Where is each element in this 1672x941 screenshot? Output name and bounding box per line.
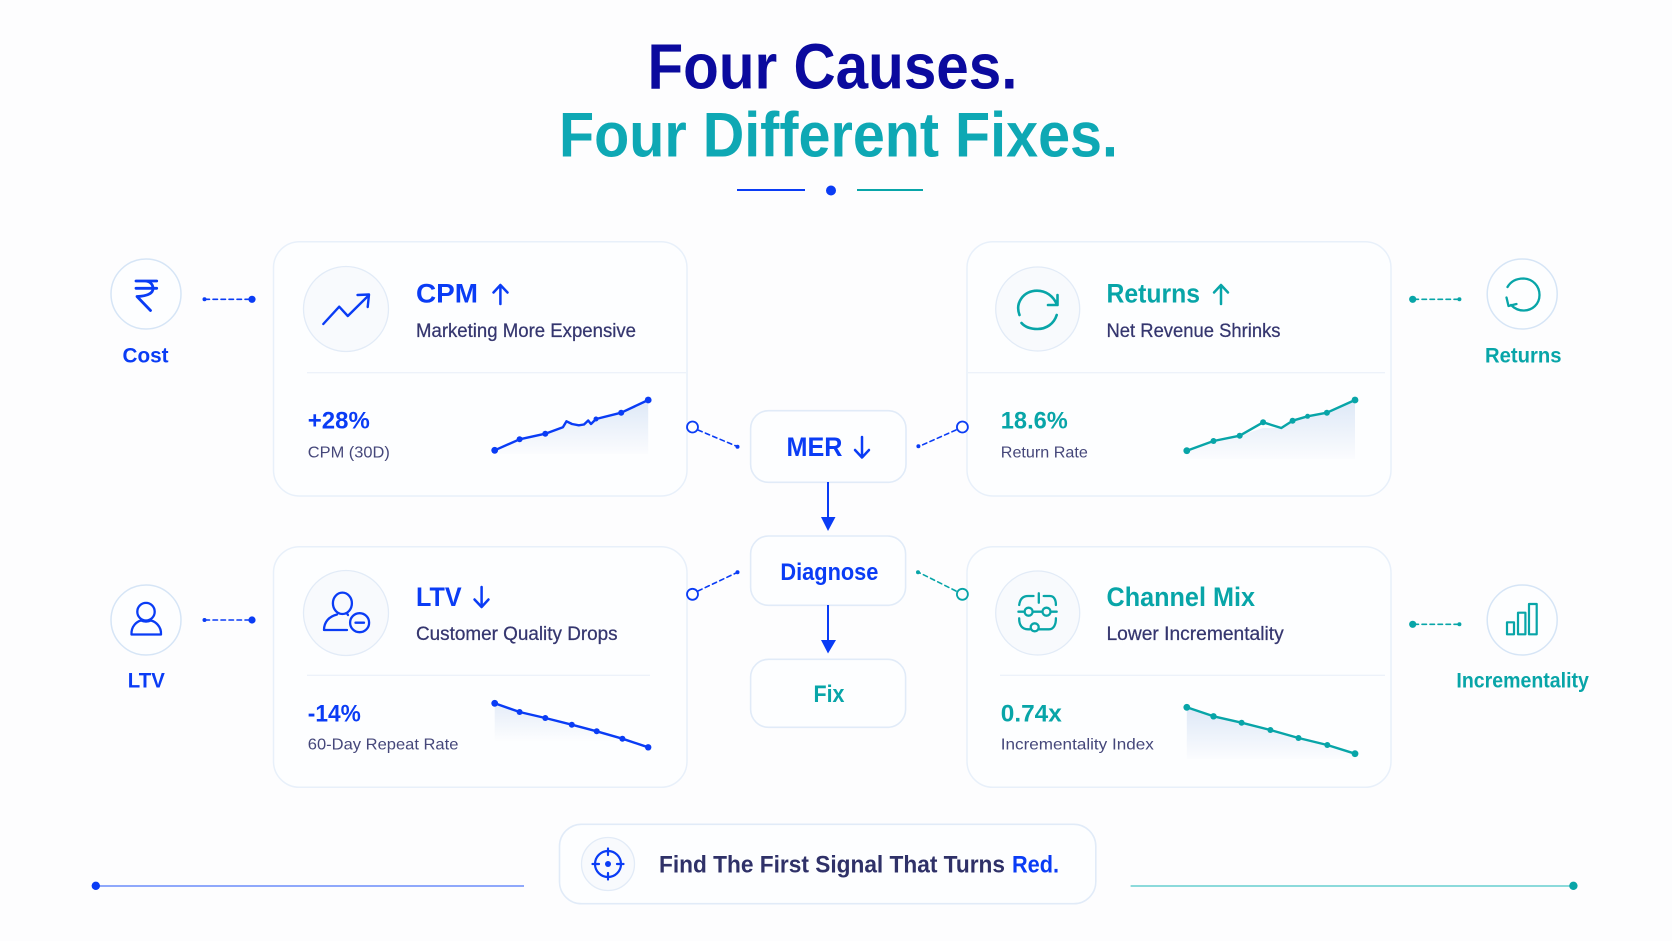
stat: 18.6% [1001,407,1068,434]
connector: returns side [1409,296,1461,303]
connector: cost to CPM [202,296,256,303]
title divider [737,186,923,196]
icon: rupee [136,281,157,310]
arrow: diagnose to fix [821,605,836,654]
connector: incrementality side [1409,621,1461,628]
stat label: Return Rate [1001,444,1088,461]
callout text: Find The First Signal That Turns [659,851,1005,878]
connector: returns to MER [916,422,968,448]
box: diagnose: Diagnose [780,559,878,586]
stat label: 60-Day Repeat Rate [308,736,459,753]
box: diagnose [751,536,906,605]
connector: LTV to diagnose [687,570,740,600]
sparkline: falling incrementality [1183,704,1358,759]
heading: channel mix: Channel Mix [1106,582,1255,612]
connector: LTV side [202,616,256,624]
arrow: MER to diagnose [821,482,836,531]
callout: first signal [560,824,1096,904]
panel: CPM [274,242,687,496]
stat label: CPM (30D) [308,444,390,461]
connector: channel mix to diagnose [916,570,968,600]
panel: returns [967,242,1391,496]
heading: LTV down: LTV [416,582,462,612]
icon: channel sliders [996,571,1080,655]
side label: incrementality: Incrementality [1456,669,1589,692]
sparkline: rising CPM [491,397,652,454]
panel: channel mix [967,547,1391,787]
sparkline: rising return rate [1183,397,1358,459]
footer line: left [92,882,524,890]
side label: returns [1485,259,1562,368]
subtitle: Net Revenue Shrinks [1106,321,1280,342]
box: MER [751,411,906,482]
side label: incrementality [1456,585,1589,692]
stat: 0.74x [1001,701,1062,728]
icon: trend up [304,266,388,352]
callout emphasis: Red. [1012,851,1059,878]
icon: refresh small [1506,278,1540,310]
title line 2: Four Different Fixes. [559,100,1118,170]
panel: LTV [274,547,687,787]
heading: CPM up: CPM [416,279,478,309]
icon: refresh [996,267,1080,351]
heading: returns up: Returns [1106,279,1200,309]
footer line: right [1131,882,1578,890]
connector: CPM to MER [687,422,740,449]
stat: +28% [308,407,370,434]
side label: cost: Cost [122,345,169,368]
subtitle: Lower Incrementality [1106,624,1284,645]
side label: LTV [111,585,181,692]
stat label: Incrementality Index [1001,736,1154,753]
subtitle: Marketing More Expensive [416,321,636,342]
heading: CPM up [416,279,508,309]
side label: returns: Returns [1485,345,1562,368]
box: MER: MER [786,432,842,462]
icon: person [131,603,161,634]
side label: LTV: LTV [128,669,165,692]
icon: person minus [304,570,388,656]
side label: cost [111,259,181,368]
title line 1: Four Causes. [648,30,1018,102]
icon: bars [1507,604,1537,634]
subtitle: Customer Quality Drops [416,624,618,645]
sparkline: falling repeat rate [491,700,651,750]
box: fix [751,659,906,727]
box: fix: Fix [814,681,845,708]
icon: target [582,838,634,890]
stat: -14% [308,701,361,728]
title [559,30,1118,170]
heading: LTV down [416,582,488,612]
